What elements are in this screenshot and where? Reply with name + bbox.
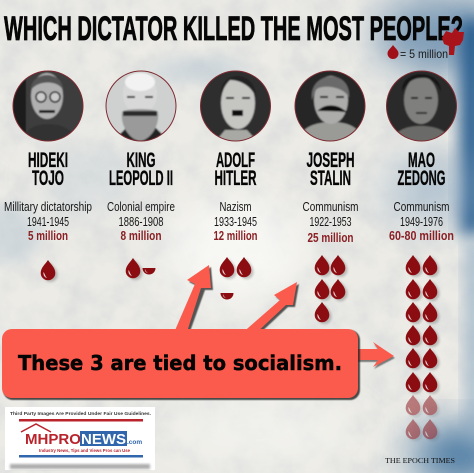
legend: drop equals 5 million: = 5 million [400, 47, 448, 61]
portrait: Hideki Tojo [12, 70, 84, 142]
column: Joseph Stalin text: 1922-1953 [310, 214, 352, 229]
column: King Leopold II text: LEOPOLD II [109, 166, 173, 190]
legend: drop equals 5 million [388, 45, 448, 61]
drops: Mao [406, 255, 440, 441]
callout: these 3 are tied to socialism [2, 329, 360, 400]
logo: MHProNews: Industry News, Tips and Views Pros can Use [39, 448, 130, 453]
logo: MHProNews [5, 407, 155, 470]
drops: Hitler [220, 257, 254, 300]
logo: MHProNews: NEWS [81, 431, 126, 448]
column: Joseph Stalin text: STALIN [310, 166, 351, 190]
arrow: to Hitler [173, 265, 213, 337]
column: King Leopold II text: Colonial empire [107, 199, 175, 214]
column: Adolf Hitler text: HITLER [214, 166, 257, 190]
callout: these 3 are tied to socialism: These 3 are tied to socialism. [18, 351, 342, 375]
column: King Leopold II text: KING [126, 148, 156, 172]
drops: Tojo [41, 260, 58, 282]
logo: MHProNews: Third Party Images Are Provided Under Fair Use Guidelines. [10, 411, 151, 417]
drops: Leopold [126, 258, 156, 280]
column: Adolf Hitler text: ADOLF [216, 148, 255, 172]
column: Hideki Tojo text: Millitary dictatorship [4, 199, 92, 214]
column: Joseph Stalin text: JOSEPH [306, 148, 354, 172]
column: Hideki Tojo text: TOJO [32, 166, 64, 190]
logo: MHProNews: .com [127, 439, 142, 446]
column: Mao Zedong text: 60-80 million [389, 229, 454, 243]
column: Hideki Tojo text: 1941-1945 [27, 214, 69, 229]
arrow: to Mao [355, 342, 395, 369]
column: King Leopold II text: 8 million [120, 229, 162, 243]
portrait: Joseph Stalin [294, 70, 366, 142]
credit: The Epoch Times: THE EPOCH TIMES [385, 456, 455, 465]
column: Mao Zedong text: Communism [394, 199, 450, 214]
logo: MHProNews: MHPRO [25, 431, 81, 448]
portrait: King Leopold II [105, 70, 177, 142]
column: Joseph Stalin text [302, 148, 358, 245]
column: Adolf Hitler text: 12 million [214, 229, 258, 243]
portrait: Mao Zedong [386, 70, 458, 142]
column: Adolf Hitler text [214, 148, 258, 243]
column: Mao Zedong text: 1949-1976 [400, 214, 443, 229]
column: King Leopold II text [107, 148, 175, 243]
icon: red blood splat [442, 28, 464, 55]
column: Adolf Hitler text: Nazism [220, 199, 252, 214]
column: Mao Zedong text [389, 148, 454, 243]
column: Joseph Stalin text: 25 million [308, 231, 354, 245]
arrow: to Stalin [240, 282, 299, 337]
column: Joseph Stalin text: Communism [302, 199, 358, 214]
portrait: Adolf Hitler [200, 70, 272, 142]
column: Hideki Tojo text [4, 148, 92, 243]
column: King Leopold II text: 1886-1908 [118, 214, 164, 229]
column: Mao Zedong text: MAO [408, 148, 435, 172]
drops: Stalin [315, 255, 348, 324]
column: Hideki Tojo text: 5 million [28, 229, 68, 243]
column: Adolf Hitler text: 1933-1945 [214, 214, 257, 229]
column: Hideki Tojo text: HIDEKI [28, 148, 68, 172]
